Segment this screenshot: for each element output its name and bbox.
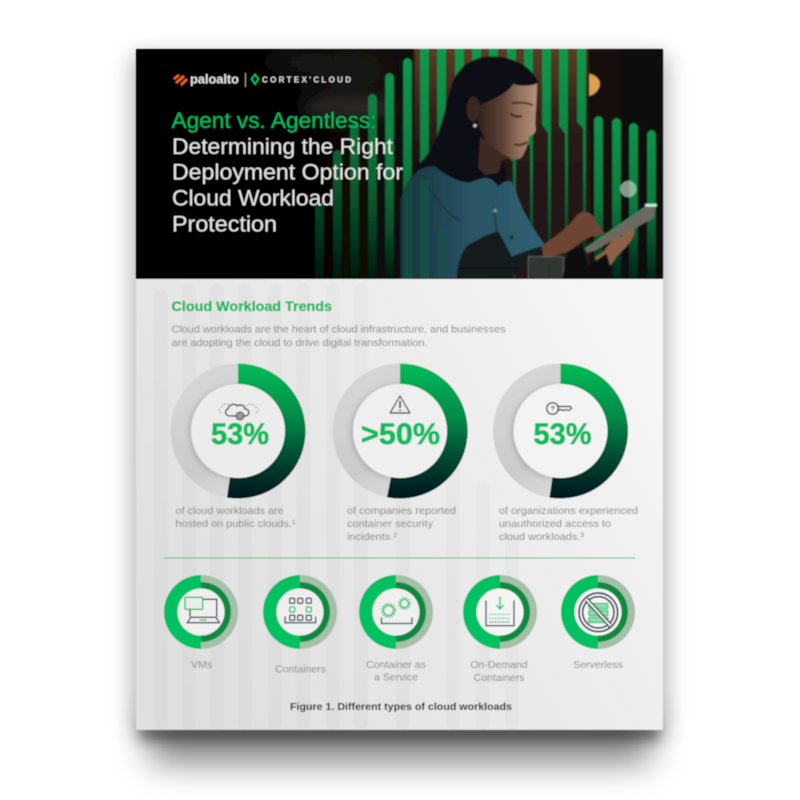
hand <box>542 212 605 257</box>
icon: cloud with gear <box>219 404 258 420</box>
icon: laptop and VM window <box>185 597 219 623</box>
caption: unauthorized access: unauthorized access to <box>499 518 611 530</box>
title: Cloud Workload <box>172 186 334 210</box>
icon: gears on tray <box>382 598 412 624</box>
intro text: Cloud workloads are the heart of cloud infrastructure, and businesses <box>172 324 506 336</box>
header panel <box>136 40 663 298</box>
title: Agent vs. Agentless: <box>172 108 376 133</box>
stat donut: 53% public clouds <box>170 364 306 498</box>
caption: container incidents: container security <box>347 518 434 530</box>
caption: container incidents <box>347 505 456 543</box>
title: Determining the Right <box>172 134 394 159</box>
bokeh <box>620 181 637 197</box>
title: Protection <box>172 212 277 236</box>
background office glow <box>265 45 590 283</box>
icon: warning triangle <box>390 396 410 413</box>
caption: container incidents: of companies reported <box>347 505 456 517</box>
label: On-Demand <box>470 659 528 671</box>
icon: container grid <box>285 598 316 623</box>
workload: Serverless <box>561 575 635 671</box>
logo: Palo Alto Networks: paloalto <box>190 72 239 86</box>
caption: public clouds: of cloud workloads are <box>176 505 284 517</box>
title: Deployment Option for <box>172 160 404 184</box>
label: Serverless <box>573 659 623 671</box>
hair <box>413 57 538 188</box>
value: >50% <box>361 418 440 451</box>
intro text <box>172 324 506 349</box>
photo: woman with tablet <box>400 57 657 280</box>
title <box>172 108 404 236</box>
label: Container as <box>366 659 426 671</box>
caption: public clouds: hosted on public clouds.¹ <box>176 518 296 530</box>
value: 53% <box>211 418 269 451</box>
value: 53% <box>534 418 592 451</box>
face <box>478 83 537 159</box>
dark sleeve <box>457 232 543 278</box>
intro text: are adopting the cloud to drive digital transformation. <box>172 337 428 349</box>
tablet <box>585 207 656 253</box>
logo: Cortex Cloud: CORTEX'CLOUD <box>262 76 351 84</box>
caption: unauthorized access: cloud workloads.³ <box>499 531 585 543</box>
icon: download into bin <box>486 597 514 626</box>
label: a Service <box>374 672 418 684</box>
label: VMs <box>191 659 212 671</box>
caption: public clouds <box>176 505 296 530</box>
workload: On-Demand Containers <box>463 575 537 684</box>
ear <box>467 96 480 122</box>
workload: Containers <box>263 575 337 676</box>
stat donut: >50% container incidents <box>332 363 468 498</box>
label: Containers <box>275 664 326 676</box>
fingers <box>595 229 635 272</box>
stat donut: 53% unauthorized access <box>493 364 628 498</box>
icon: no servers <box>579 593 618 632</box>
caption: unauthorized access: of organizations experienced <box>499 505 638 517</box>
page drop shadow <box>132 55 667 762</box>
neck <box>478 137 515 175</box>
caption: container incidents: incidents.² <box>347 531 398 543</box>
lamp <box>589 73 600 96</box>
workload: VMs <box>164 575 238 671</box>
icon: key: ? <box>550 406 555 413</box>
bars over shirt <box>403 180 446 279</box>
glass <box>528 257 563 280</box>
logo: Palo Alto Networks <box>174 72 246 87</box>
label: Containers <box>474 672 524 684</box>
workload: Container as a Service <box>359 575 433 684</box>
section heading: Cloud Workload Trends <box>172 299 332 314</box>
body panel <box>136 279 663 730</box>
green rising bars <box>315 40 656 298</box>
figure caption: Figure 1. Different types of cloud workloads <box>290 701 512 713</box>
shirt <box>400 167 544 278</box>
caption: unauthorized access <box>499 505 638 543</box>
